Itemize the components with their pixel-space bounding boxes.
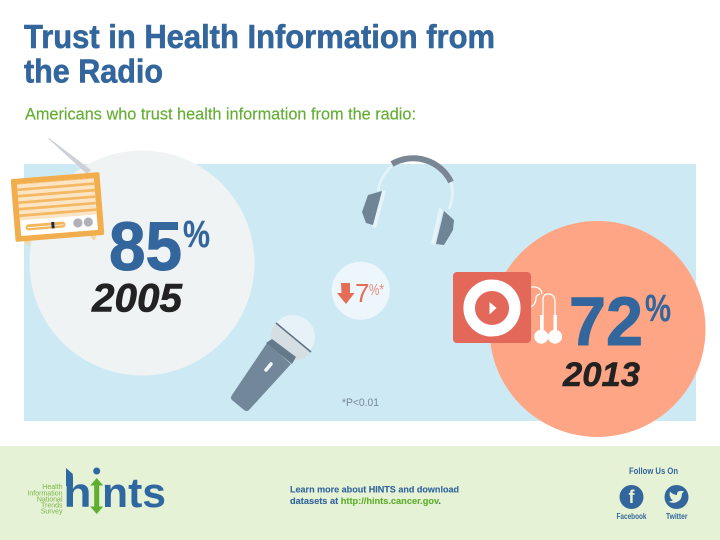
icon: music player — [453, 272, 562, 344]
title: the Radio — [24, 52, 163, 90]
logo tagline: Survey — [41, 508, 63, 516]
icon: facebook: f — [628, 487, 636, 507]
label: twitter: Twitter — [666, 512, 688, 521]
callout: 7 percent decrease: %* — [369, 282, 384, 299]
icon: down arrow — [337, 283, 354, 304]
stat: 72 percent: 72 — [569, 283, 643, 360]
callout: 7 percent decrease — [332, 262, 390, 320]
subtitle: Americans who trust health information from the radio: — [25, 104, 416, 124]
panel: footer — [0, 446, 720, 540]
logo wordmark — [64, 469, 166, 516]
stat: 85 percent: % — [183, 214, 210, 256]
callout: 7 percent decrease: 7 — [355, 278, 369, 308]
icon: headphones — [362, 158, 454, 245]
logo: HINTS — [27, 468, 166, 516]
link text: datasets at http://hints.cancer.gov. — [290, 496, 441, 507]
label: facebook: Facebook — [616, 512, 647, 521]
logo wordmark: h — [64, 469, 92, 516]
icon: twitter — [664, 485, 688, 509]
link text: Learn more about HINTS and download — [290, 484, 459, 496]
icon: facebook — [620, 485, 644, 509]
panel: blue background — [24, 164, 696, 421]
stat: 85 percent: 85 — [109, 208, 182, 285]
social heading: Follow Us On — [629, 466, 678, 476]
panel: 2013 circle — [490, 221, 706, 437]
logo wordmark: nts — [102, 469, 166, 516]
logo tagline: Information — [27, 490, 63, 497]
logo tagline: Trends — [41, 502, 63, 510]
logo tagline — [27, 484, 63, 516]
title — [24, 18, 495, 90]
year: 2013: 2013 — [562, 356, 640, 394]
footnote: *P<0.01 — [342, 397, 379, 409]
year: 2005: 2005 — [91, 276, 183, 320]
link text — [290, 484, 459, 507]
logo tagline: National — [37, 496, 63, 504]
logo tagline: Health — [42, 484, 63, 491]
title: Trust in Health Information from — [24, 18, 495, 55]
icon: microphone — [231, 315, 315, 411]
icon: radio — [11, 138, 105, 246]
panel: 2005 circle — [30, 150, 254, 376]
stat: 72 percent: % — [645, 288, 671, 330]
